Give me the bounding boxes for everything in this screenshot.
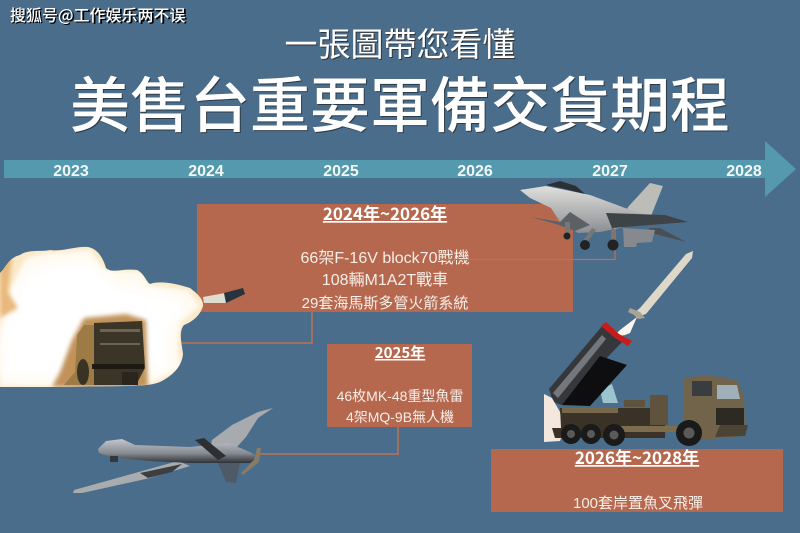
canopy — [546, 181, 585, 194]
image: HIMARS rocket launch — [0, 245, 245, 390]
year labels: 2027 — [592, 163, 628, 180]
lower wing and pylon — [531, 212, 590, 231]
year labels: 2023 — [53, 163, 89, 180]
truck bed — [552, 408, 665, 438]
panel: 2024-2026 deliveries — [197, 200, 573, 312]
wheels — [561, 420, 702, 446]
panel: 2026-2028 deliveries: 2026年~2028年 — [575, 444, 699, 469]
year labels: 2025 — [323, 163, 359, 180]
connector: F-16 to panel — [440, 228, 615, 260]
missile — [633, 251, 693, 317]
year labels: 2024 — [188, 163, 224, 180]
fuselage — [520, 186, 650, 233]
image: Harpoon coastal defense launcher truck — [544, 251, 748, 446]
wing far — [210, 408, 273, 449]
main wing — [606, 213, 688, 228]
launcher flash — [544, 394, 564, 442]
panel: 2026-2028 deliveries — [491, 444, 783, 512]
panel: 2026-2028 deliveries: 100套岸置魚叉飛彈 — [573, 495, 703, 512]
panel: 2024-2026 deliveries: 2024年~2026年 — [323, 200, 447, 225]
fuselage — [98, 439, 258, 463]
panel: 2024-2026 deliveries: 29套海馬斯多管火箭系統 — [302, 294, 468, 312]
equipment — [624, 395, 668, 425]
rocket — [203, 288, 245, 303]
timeline arrow — [4, 141, 796, 197]
title: 美售台重要軍備交貨期程 — [70, 58, 730, 145]
year labels: 2026 — [457, 163, 493, 180]
panel: 2025 deliveries: 46枚MK-48重型魚雷 — [337, 388, 463, 404]
watermark: 搜狐号@工作娱乐两不误 — [10, 2, 186, 26]
panel: 2024-2026 deliveries: 108輛M1A2T戰車 — [322, 271, 448, 289]
propeller — [241, 448, 261, 475]
subtitle: 一張圖帶您看懂 — [286, 19, 516, 67]
panel: 2024-2026 deliveries: 66架F-16V block70戰機 — [301, 249, 469, 267]
panel: 2025 deliveries: 2025年 — [375, 342, 425, 363]
truck cab — [64, 321, 145, 385]
wing near — [73, 461, 190, 493]
landing gear — [564, 222, 618, 250]
exhaust plume — [613, 317, 637, 337]
tail fin — [625, 183, 663, 216]
year labels: 2028 — [726, 163, 762, 180]
watermark: 搜狐号@工作娱乐两不误 — [11, 3, 187, 27]
panel: 2025 deliveries — [327, 342, 472, 427]
image: MQ-9B drone — [73, 408, 273, 493]
image: F-16V fighter jet — [520, 181, 688, 250]
launcher tubes — [549, 322, 632, 405]
truck cab — [683, 375, 745, 440]
connector: HIMARS to panel — [178, 312, 312, 343]
connector: drone to panel — [258, 427, 398, 454]
ventral fin — [218, 463, 240, 483]
engine pod — [623, 228, 655, 247]
panel: 2025 deliveries: 4架MQ-9B無人機 — [346, 409, 454, 425]
year labels — [53, 163, 762, 180]
launcher box — [562, 356, 627, 406]
title: 美售台重要軍備交貨期程 — [71, 59, 731, 146]
tailplane — [648, 228, 686, 242]
subtitle: 一張圖帶您看懂 — [284, 18, 516, 66]
launcher gap — [600, 384, 618, 403]
